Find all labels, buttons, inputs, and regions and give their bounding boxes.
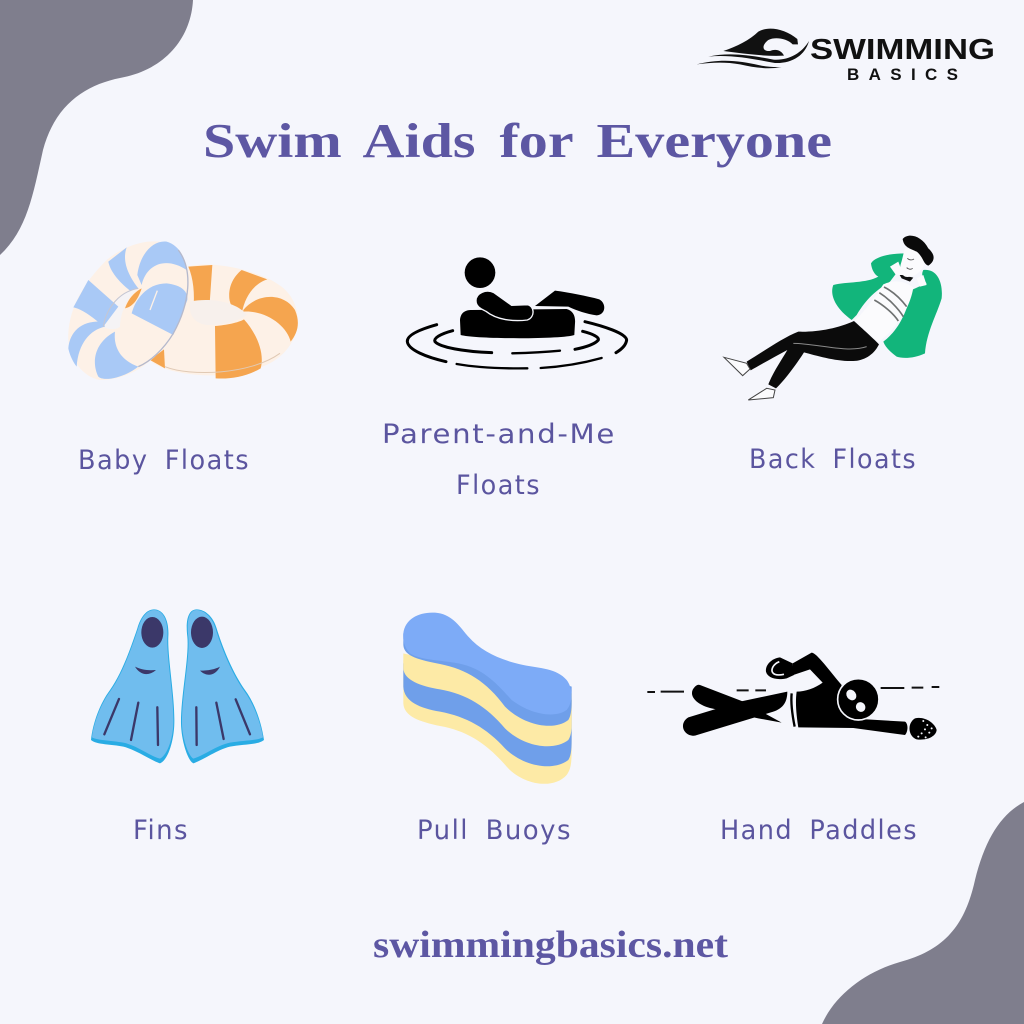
label: Hand Paddles: Hand Paddles [720, 815, 918, 846]
arm [476, 291, 533, 321]
blue ring [68, 241, 188, 380]
stroke line by hip [791, 693, 795, 727]
bottom-right corner blob [822, 802, 1024, 1024]
left fin [91, 609, 174, 763]
black trousers [747, 321, 879, 388]
float tube [460, 309, 575, 338]
face and neck [900, 248, 924, 277]
logo icon: swimmer and waves [697, 29, 809, 68]
icon: swim fins [91, 609, 264, 763]
right fin [181, 609, 264, 763]
green jacket right side [883, 270, 942, 358]
logo subtitle: BASICS [847, 65, 958, 84]
icon: relaxing man floating on back [724, 236, 942, 400]
closed eyes and mouth [907, 258, 914, 269]
icon: baby float rings [68, 241, 298, 380]
water ripples [407, 322, 627, 368]
raised hand paddle [766, 657, 794, 679]
water line dashes [647, 687, 939, 692]
label: Baby Floats: Baby Floats [78, 445, 250, 476]
icon: parent-and-me float [407, 257, 627, 368]
label: Parent-and-Me Floats [382, 419, 616, 501]
label: Parent-and-Me Floats: Floats [456, 470, 541, 501]
head [465, 257, 495, 288]
bottom yellow layer [403, 660, 572, 784]
label: Fins: Fins [133, 815, 189, 846]
front leg [683, 692, 787, 736]
green jacket left sleeve [832, 253, 905, 320]
logo wordmark: SWIMMING [810, 34, 995, 66]
torso and arms [793, 653, 907, 735]
top layer side [403, 633, 572, 726]
title: Swim Aids for Everyone [203, 113, 832, 168]
white shirt [855, 281, 913, 342]
back leg [692, 685, 782, 723]
footer website address: swimmingbasics.net [373, 924, 728, 966]
shirt stripes [874, 287, 907, 321]
logo: Swimming Basics [697, 29, 995, 84]
neck collar [899, 274, 913, 282]
shoes [724, 357, 750, 376]
hair [903, 236, 934, 266]
blue middle layer [403, 663, 572, 766]
label: Parent-and-Me Floats: Parent-and-Me [382, 419, 616, 450]
front hand paddle with holes [909, 718, 937, 740]
head with swim cap and goggles [838, 679, 879, 720]
label: Back Floats: Back Floats [749, 444, 917, 475]
raised leg [535, 291, 604, 315]
icon: swimmer with hand paddles [647, 653, 939, 740]
yellow upper layer [403, 653, 572, 746]
label: Pull Buoys: Pull Buoys [417, 815, 572, 846]
orange ring [150, 265, 298, 379]
hands behind head [890, 262, 927, 287]
top face [403, 613, 571, 714]
top-left corner blob [0, 0, 193, 255]
icon: pull buoy [403, 613, 572, 784]
